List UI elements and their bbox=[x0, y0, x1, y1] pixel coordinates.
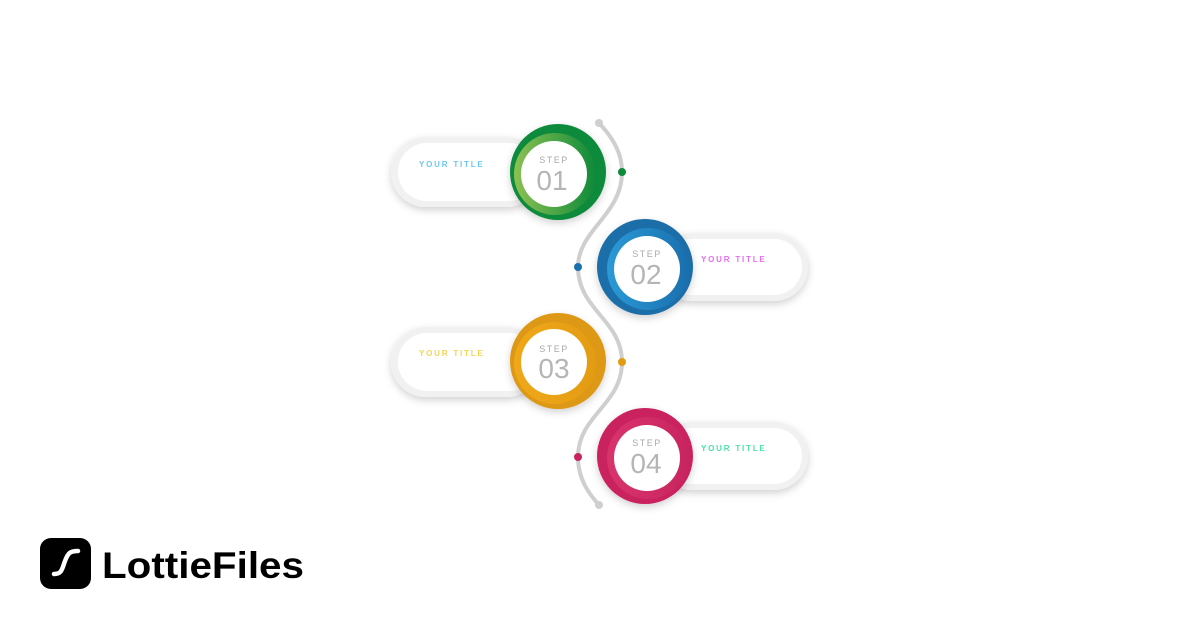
step 1 bbox=[391, 124, 606, 220]
step 2: 02 bbox=[630, 259, 662, 290]
step 1: 01 bbox=[536, 165, 568, 196]
step 3: STEP bbox=[539, 344, 569, 354]
step 4: 04 bbox=[630, 448, 662, 479]
connector curve bbox=[574, 119, 626, 509]
step 2: STEP bbox=[632, 249, 662, 259]
step 2 bbox=[597, 219, 808, 315]
step 3 bbox=[391, 313, 606, 409]
step 1: STEP bbox=[539, 155, 569, 165]
step 4 bbox=[597, 408, 808, 504]
step 1: YOUR TITLE bbox=[419, 160, 485, 169]
step 4: YOUR TITLE bbox=[701, 444, 767, 453]
step 3: 03 bbox=[538, 353, 570, 384]
step 3: YOUR TITLE bbox=[419, 349, 485, 358]
logo bbox=[40, 538, 304, 589]
logo: LottieFiles bbox=[102, 545, 304, 586]
step 4: STEP bbox=[632, 438, 662, 448]
step 2: YOUR TITLE bbox=[701, 255, 767, 264]
